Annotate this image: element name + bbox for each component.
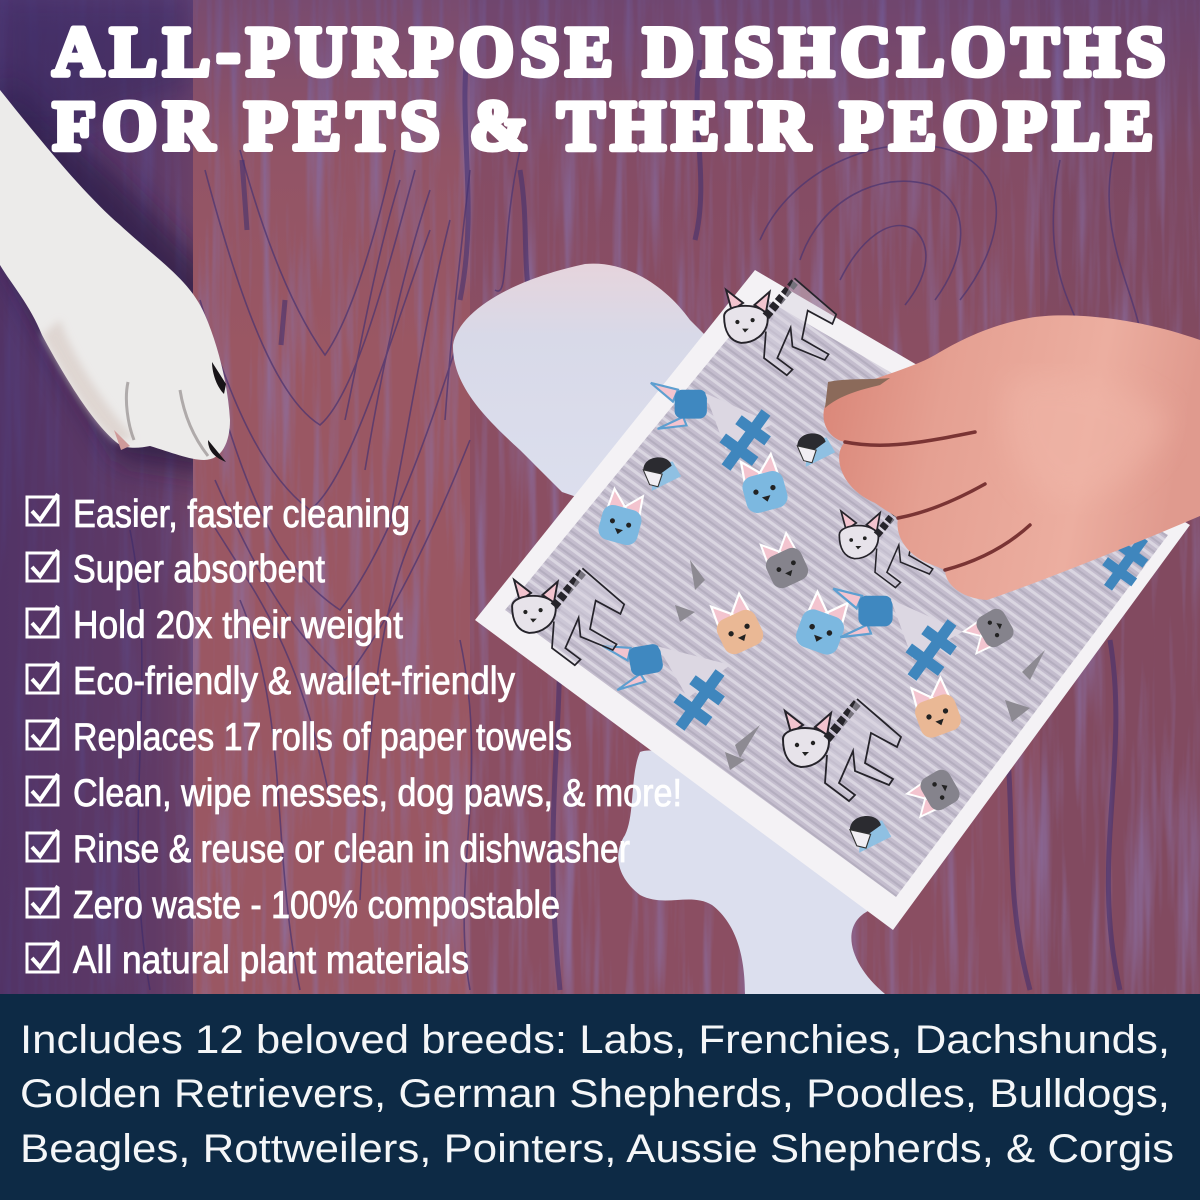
banner text: [20, 1018, 1174, 1171]
bottom banner: [0, 994, 1200, 1200]
dishcloth: [475, 270, 1190, 930]
cloth pattern: black faces: [643, 433, 891, 853]
title line 2: FOR PETS & THEIR PEOPLE: [53, 88, 1153, 165]
dog paw: [0, 90, 230, 462]
item 5: Replaces 17 rolls of paper towels: [73, 716, 572, 759]
banner text: Includes 12 beloved breeds: Labs, Frenchies, Dachshunds,: [20, 1018, 1170, 1062]
cloth pattern: grey faces: [756, 531, 1017, 821]
checklist: [27, 493, 682, 982]
item 1: Easier, faster cleaning: [73, 493, 410, 536]
cloth pattern: blue cross tails: [664, 401, 1159, 739]
item 2: Super absorbent: [73, 548, 325, 591]
cloth pattern: long-eared blue dogs: [603, 383, 963, 711]
item 9: All natural plant materials: [73, 939, 469, 982]
title: [53, 14, 1165, 165]
cloth pattern: tan faces: [706, 591, 964, 741]
cloth white border: [475, 270, 1190, 930]
left plank shadow: [0, 0, 193, 1000]
cloth printed area: [505, 297, 1168, 897]
cloth pattern: outlined dogs: [512, 278, 940, 801]
item 8: Zero waste - 100% compostable: [73, 884, 560, 927]
title line 1: ALL-PURPOSE DISHCLOTHS: [53, 14, 1165, 91]
item 4: Eco-friendly & wallet-friendly: [73, 660, 515, 703]
banner text: Golden Retrievers, German Shepherds, Poodles, Bulldogs,: [20, 1072, 1170, 1116]
milk spill lower: [618, 750, 885, 994]
item 7: Rinse & reuse or clean in dishwasher: [73, 828, 630, 871]
item 6: Clean, wipe messes, dog paws, & more!: [73, 772, 682, 815]
cloth pattern: blue bulldog faces: [596, 453, 853, 658]
hand: [823, 315, 1200, 600]
milk spill upper: [453, 264, 720, 505]
item 3: Hold 20x their weight: [73, 604, 403, 647]
banner text: Beagles, Rottweilers, Pointers, Aussie Shepherds, & Corgis: [20, 1127, 1174, 1171]
cloth pattern: small fox dogs: [675, 560, 1045, 770]
